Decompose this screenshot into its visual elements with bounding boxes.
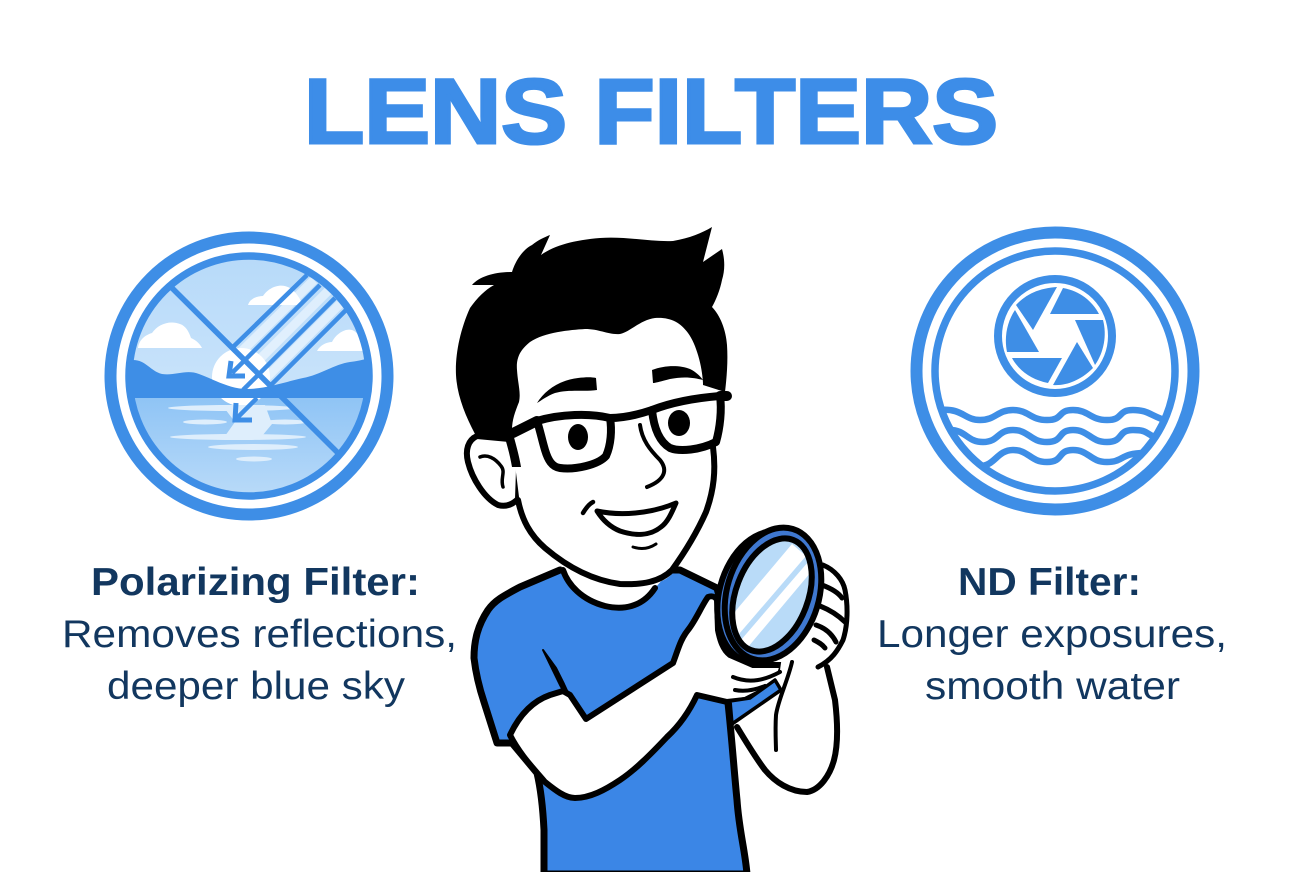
fingers on the far hand <box>814 565 847 667</box>
right arm <box>737 568 848 792</box>
icon: polarizing filter <box>110 238 388 514</box>
t-shirt <box>474 570 747 872</box>
neck and collar <box>540 510 700 607</box>
icon detail: aperture <box>998 279 1112 393</box>
eyebrows <box>537 377 597 403</box>
text: polarizing filter: Removes reflections, <box>62 613 457 656</box>
filter: back rim <box>703 520 827 674</box>
icon detail: mountains <box>132 360 366 398</box>
mouth <box>597 503 676 534</box>
text: ND filter: ND Filter: <box>958 561 1141 604</box>
text: ND filter: Longer exposures, <box>877 613 1227 656</box>
icon detail: arrows <box>229 361 252 420</box>
icon: ND filter <box>916 232 1194 510</box>
icon detail: sun <box>212 348 270 406</box>
glasses <box>513 396 727 468</box>
sleeve crease <box>543 650 570 697</box>
icon detail: water reflections <box>168 405 307 462</box>
hair <box>456 227 727 467</box>
text: ND filter: smooth water <box>925 665 1180 708</box>
ear inner <box>480 456 503 487</box>
ear <box>467 436 520 506</box>
face <box>512 320 714 584</box>
icon detail: clouds <box>138 286 364 351</box>
filter: rim <box>709 516 837 672</box>
filter: glass <box>729 535 815 655</box>
character: person holding filter <box>456 227 848 872</box>
left arm <box>510 596 783 798</box>
fingers on the near hand <box>733 672 780 691</box>
chin <box>633 544 656 548</box>
sleeve tail <box>730 680 781 724</box>
text: polarizing filter <box>62 561 457 708</box>
text: polarizing filter: deeper blue sky <box>107 665 406 708</box>
nose <box>640 425 664 487</box>
arm crease <box>776 662 792 750</box>
text: polarizing filter: Polarizing Filter: <box>91 561 420 604</box>
jaw outline <box>518 447 714 584</box>
title: LENS FILTERS <box>304 61 998 163</box>
icon detail: light rays <box>240 280 340 382</box>
icon detail: water waves <box>940 410 1170 466</box>
icon detail: crossing line <box>170 286 340 455</box>
eyes <box>568 424 588 450</box>
text: ND filter <box>877 561 1227 708</box>
